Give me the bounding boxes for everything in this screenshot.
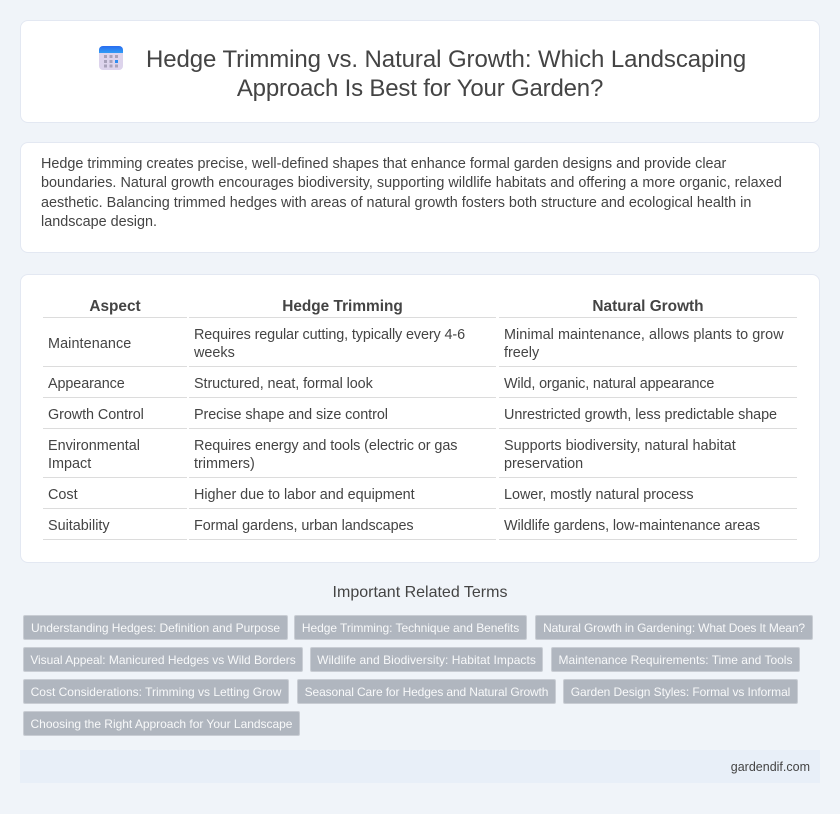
related terms heading: Important Related Terms [333,584,507,601]
related term tags: Choosing the Right Approach for Your Landscape [31,717,292,731]
summary text [41,156,782,230]
comparison table: Unrestricted growth, less predictable shape [504,407,777,423]
footer source label: gardendif.com [731,760,810,774]
comparison table: Requires energy and tools (electric or gas [194,438,457,454]
comparison table: Appearance [48,376,125,392]
comparison table: Wildlife gardens, low-maintenance areas [504,518,760,534]
comparison table: Suitability [48,518,110,534]
title [146,46,746,102]
comparison table: Structured, neat, formal look [194,376,373,392]
summary text: aesthetic. Balancing trimmed hedges with areas of natural growth fosters both structure and ecological health in [41,194,751,210]
related term tags: Wildlife and Biodiversity: Habitat Impacts [317,653,536,667]
comparison table [43,298,797,540]
related term tags: Hedge Trimming: Technique and Benefits [302,621,519,635]
comparison table: Wild, organic, natural appearance [504,376,714,392]
related term tags: Natural Growth in Gardening: What Does It Mean? [543,621,805,635]
related term tags: Maintenance Requirements: Time and Tools [559,653,792,667]
header card [20,20,820,123]
title: Approach Is Best for Your Garden? [237,75,603,102]
comparison table: Aspect [89,298,141,315]
related term tags: Cost Considerations: Trimming vs Letting Grow [31,685,281,699]
comparison table: Supports biodiversity, natural habitat [504,438,736,454]
related term tags: Garden Design Styles: Formal vs Informal [571,685,790,699]
comparison table: preservation [504,456,583,472]
comparison table: Environmental [48,438,140,454]
comparison table: weeks [194,345,235,361]
comparison table: Maintenance [48,336,131,352]
related term tags [23,615,813,736]
comparison table: freely [504,345,539,361]
summary text: boundaries. Natural growth encourages biodiversity, supporting wildlife habitats and offering a more organic, relaxed [41,175,782,191]
title: Hedge Trimming vs. Natural Growth: Which Landscaping [146,46,746,73]
comparison table: Higher due to labor and equipment [194,487,415,503]
comparison table: Precise shape and size control [194,407,388,423]
summary card [20,142,820,253]
comparison table card [20,274,820,563]
summary text: landscape design. [41,214,157,230]
comparison table: Formal gardens, urban landscapes [194,518,414,534]
summary text: Hedge trimming creates precise, well-defined shapes that enhance formal garden designs and provide clear [41,156,726,172]
comparison table: Hedge Trimming [282,298,403,315]
comparison table: Impact [48,456,91,472]
footer [20,750,820,783]
comparison table: Minimal maintenance, allows plants to grow [504,327,784,343]
related term tags: Seasonal Care for Hedges and Natural Growth [305,685,548,699]
related term tags: Visual Appeal: Manicured Hedges vs Wild Borders [30,653,296,667]
comparison table: Cost [48,487,78,503]
comparison table: Requires regular cutting, typically every 4-6 [194,327,465,343]
related term tags: Understanding Hedges: Definition and Purpose [31,621,280,635]
icon: calendar [99,46,123,70]
comparison table: trimmers) [194,456,255,472]
comparison table: Lower, mostly natural process [504,487,694,503]
comparison table: Natural Growth [592,298,704,315]
comparison table: Growth Control [48,407,144,423]
